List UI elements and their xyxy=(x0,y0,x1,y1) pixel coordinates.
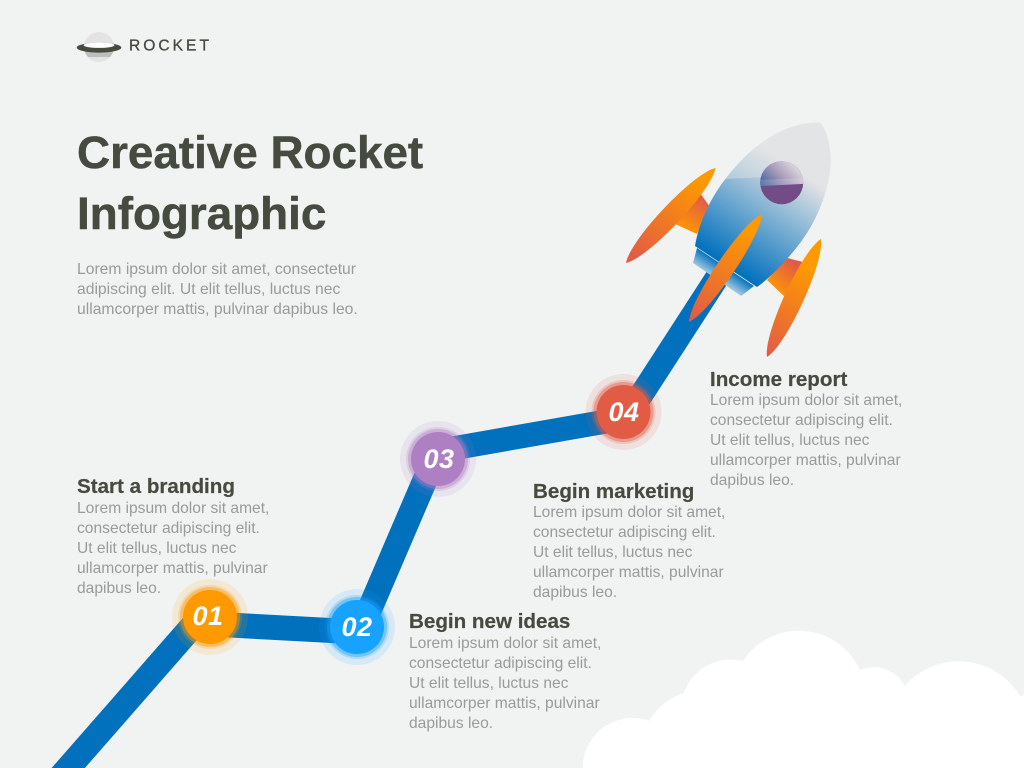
step 2 body: Lorem ipsum dolor sit amet, xyxy=(409,635,601,652)
step 2 body xyxy=(409,635,601,732)
node 03 xyxy=(400,421,476,497)
node 02: 02 xyxy=(341,612,373,642)
rocket right connector xyxy=(767,258,803,297)
step 3 text xyxy=(533,480,725,601)
rocket middle fin xyxy=(689,214,762,322)
rocket trail xyxy=(625,267,724,420)
step 3 body: ullamcorper mattis, pulvinar xyxy=(533,564,724,581)
step 3 body: Ut elit tellus, luctus nec xyxy=(533,544,692,561)
rocket left connector xyxy=(675,193,710,234)
title: Infographic xyxy=(77,188,326,239)
rocket body highlight xyxy=(726,152,770,179)
step 2 body: ullamcorper mattis, pulvinar xyxy=(409,695,600,712)
rocket body xyxy=(695,123,831,287)
logo wordmark: ROCKET xyxy=(129,38,212,55)
step 1 body: Ut elit tellus, luctus nec xyxy=(77,540,236,557)
step 4 body: dapibus leo. xyxy=(710,472,794,489)
node 01: 01 xyxy=(192,601,224,631)
node 02 xyxy=(319,589,395,665)
step 2 text xyxy=(409,610,601,732)
logo ring highlight xyxy=(84,42,114,48)
step 3 heading: Begin marketing xyxy=(533,480,694,503)
node 03: 03 xyxy=(423,444,455,474)
step 4 body: ullamcorper mattis, pulvinar xyxy=(710,452,901,469)
step 4 body: Ut elit tellus, luctus nec xyxy=(710,432,869,449)
step 4 body: Lorem ipsum dolor sit amet, xyxy=(710,392,902,409)
step 3 body: dapibus leo. xyxy=(533,584,617,601)
rocket left fin xyxy=(626,168,716,263)
step 4 body: consectetur adipiscing elit. xyxy=(710,412,893,429)
title: Creative Rocket xyxy=(77,127,423,178)
title xyxy=(77,127,423,239)
step 3 body: Lorem ipsum dolor sit amet, xyxy=(533,504,725,521)
intro text: adipiscing elit. Ut elit tellus, luctus nec xyxy=(77,281,340,298)
node 01 xyxy=(172,579,248,655)
intro text: ullamcorper mattis, pulvinar dapibus leo. xyxy=(77,301,358,318)
rocket window xyxy=(760,161,804,204)
step 4 heading: Income report xyxy=(710,368,847,391)
logo xyxy=(77,32,212,62)
cloud xyxy=(583,631,1024,768)
step 2 body: Ut elit tellus, luctus nec xyxy=(409,675,568,692)
node 04: 04 xyxy=(608,397,640,427)
rocket right fin xyxy=(767,239,821,357)
step 4 text xyxy=(710,368,902,489)
step 2 body: consectetur adipiscing elit. xyxy=(409,655,592,672)
icon: rocket xyxy=(626,110,840,357)
rocket nozzle xyxy=(693,248,754,296)
node 04 xyxy=(586,374,662,450)
intro text: Lorem ipsum dolor sit amet, consectetur xyxy=(77,261,356,278)
step 2 body: dapibus leo. xyxy=(409,715,493,732)
step 2 heading: Begin new ideas xyxy=(409,610,570,633)
step 1 body xyxy=(77,500,269,597)
step 1 body: dapibus leo. xyxy=(77,580,161,597)
logo planet xyxy=(84,32,114,62)
step 3 body xyxy=(533,504,725,601)
intro text xyxy=(77,261,358,318)
step 1 text xyxy=(77,475,269,597)
step 1 heading: Start a branding xyxy=(77,475,235,498)
rocket path line xyxy=(56,418,625,768)
step 1 body: Lorem ipsum dolor sit amet, xyxy=(77,500,269,517)
step 4 body xyxy=(710,392,902,489)
step 1 body: consectetur adipiscing elit. xyxy=(77,520,260,537)
step 1 body: ullamcorper mattis, pulvinar xyxy=(77,560,268,577)
step 3 body: consectetur adipiscing elit. xyxy=(533,524,716,541)
logo ring xyxy=(77,43,121,53)
